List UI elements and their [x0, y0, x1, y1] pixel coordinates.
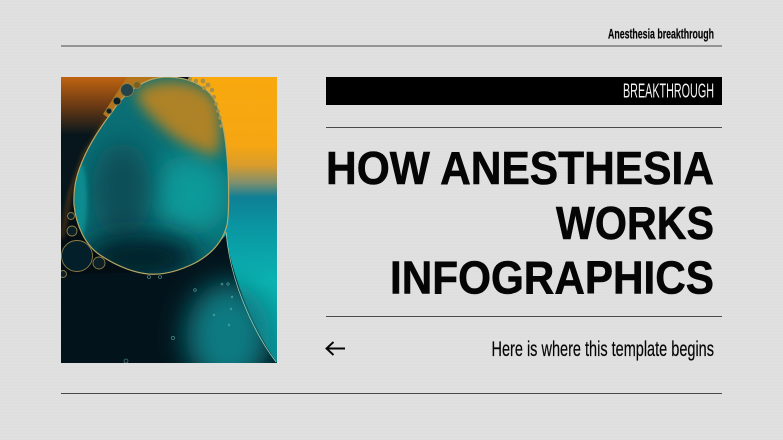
amber edge on left of bubble	[62, 118, 108, 238]
lower dark pool with teal	[190, 235, 277, 363]
small bubbles	[60, 82, 140, 278]
breakthrough banner	[326, 77, 722, 105]
title: WORKS	[556, 197, 714, 249]
amber band above bubble	[103, 77, 160, 118]
title: INFOGRAPHICS	[390, 252, 714, 304]
main bubble	[73, 77, 230, 282]
slide	[61, 28, 722, 394]
lower teal glow	[186, 283, 270, 387]
thin curve	[226, 232, 276, 362]
title	[326, 142, 714, 304]
header label: Anesthesia breakthrough	[608, 26, 714, 42]
title: HOW ANESTHESIA	[326, 142, 714, 194]
top-left amber glow	[61, 77, 127, 220]
photo: oil bubbles	[60, 77, 277, 387]
right amber and teal column	[190, 77, 277, 363]
icon: left arrow	[326, 342, 345, 355]
